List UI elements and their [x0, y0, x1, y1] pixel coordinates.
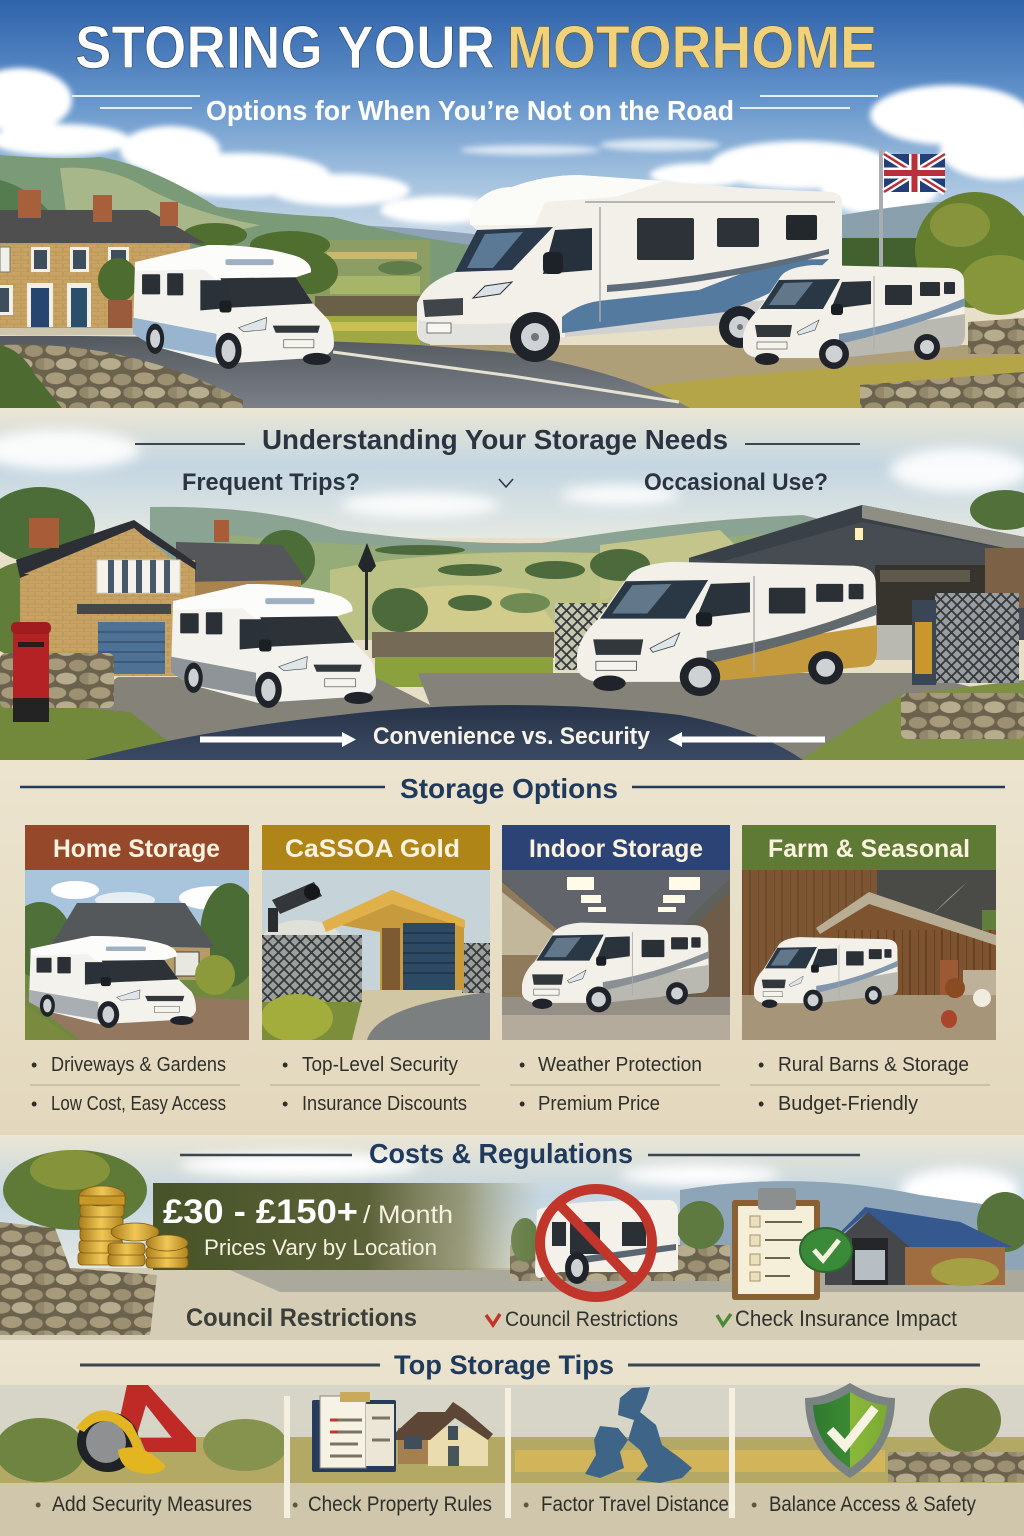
tip three: •: [523, 1495, 529, 1515]
price unit: / Month: [363, 1201, 453, 1229]
needs clouds: [0, 430, 1024, 517]
card title: Indoor Storage: [529, 835, 703, 863]
storage options heading: Storage Options: [400, 773, 618, 804]
trees right: [842, 192, 1024, 315]
icon: wheel clamp: [76, 1385, 196, 1474]
costs ground: [0, 1268, 1024, 1340]
tip four: •: [751, 1495, 757, 1515]
chevron: [499, 479, 513, 487]
card scene: [25, 870, 249, 1040]
card: cassoa gold: [261, 825, 490, 1115]
card title: Home Storage: [53, 835, 220, 863]
card scene: [502, 870, 730, 1040]
tips landscape strip: [0, 1388, 1024, 1536]
bullet one: •: [31, 1055, 37, 1075]
security gate: [555, 593, 1019, 685]
motorhome right: [743, 265, 965, 369]
back trees left: [0, 487, 315, 658]
subtitle: Options for When You’re Not on the Road: [206, 95, 734, 126]
icon: property house: [396, 1402, 493, 1466]
far hills: [330, 200, 960, 280]
frequent trips label: Frequent Trips?: [182, 469, 360, 496]
card: cassoa gold: Top-Level Security: [302, 1054, 458, 1076]
mid trees: [511, 1201, 724, 1262]
price note: Prices Vary by Location: [204, 1235, 437, 1260]
stone walls: [0, 653, 1024, 739]
house: [16, 518, 307, 676]
barn icon: [823, 1207, 1012, 1286]
row of cottages: [0, 190, 205, 335]
council restrictions label: Council Restrictions: [505, 1308, 678, 1331]
barn: [689, 505, 1024, 660]
ireland: [585, 1426, 628, 1478]
tip four: Balance Access & Safety: [769, 1493, 976, 1516]
motorhome centre: [417, 175, 842, 362]
tip one: Add Security Measures: [52, 1493, 252, 1516]
grass bank left: [0, 700, 173, 760]
bullet two: •: [282, 1094, 288, 1114]
card scene: [262, 870, 490, 1040]
tips hazy sky: [0, 1385, 1024, 1440]
check badge: [800, 1228, 852, 1272]
motorhome left: [133, 245, 334, 369]
no parking sign with motorhome: [535, 1189, 678, 1297]
needs hills and fields: [150, 507, 900, 640]
green check: [717, 1314, 731, 1325]
costs section: [0, 1135, 1024, 1340]
convenience vs security label: Convenience vs. Security: [373, 723, 651, 750]
lawn: [375, 657, 553, 687]
motorhome home side: [171, 584, 376, 708]
left tree: [3, 1150, 147, 1230]
back wall: [372, 632, 554, 658]
council restrictions bold label: Council Restrictions: [186, 1304, 417, 1332]
icon: shield: [805, 1383, 895, 1478]
card: home storage: [8, 825, 260, 1115]
bullet one: •: [282, 1055, 288, 1075]
card: farm and seasonal: [742, 825, 1002, 1115]
tip two: •: [292, 1495, 298, 1515]
tree line: [183, 223, 422, 294]
icon: uk map: [585, 1387, 692, 1483]
needs sky: [0, 408, 1024, 538]
motorhome secure side: [577, 562, 877, 696]
stone wall left: [0, 1222, 157, 1335]
tip one: •: [35, 1495, 41, 1515]
clouds: [0, 68, 1024, 224]
bullet two: •: [31, 1094, 37, 1114]
road edge line: [333, 352, 679, 402]
tips background: [0, 1340, 1024, 1536]
parchment background: [0, 760, 1024, 1137]
red check: [486, 1314, 500, 1325]
hero section: [0, 0, 1024, 408]
far hills: [680, 1181, 1024, 1270]
tip three: Factor Travel Distance: [541, 1493, 729, 1516]
title accent: MOTORHOME: [507, 14, 877, 81]
card scene: [742, 870, 996, 1040]
costs heading: Costs & Regulations: [369, 1138, 633, 1169]
bullet one: •: [758, 1055, 764, 1075]
fern: [0, 345, 62, 408]
right tree: [977, 1192, 1024, 1252]
background wall: [510, 1245, 730, 1281]
road strip: [230, 1270, 1024, 1292]
card: indoor storage: [502, 825, 730, 1115]
clipboard icon: [732, 1188, 820, 1300]
card: indoor storage: Premium Price: [538, 1093, 660, 1115]
tips heading: Top Storage Tips: [394, 1350, 614, 1380]
title: STORING YOUR: [75, 14, 495, 81]
flag: [879, 148, 945, 266]
card: cassoa gold: Insurance Discounts: [302, 1093, 467, 1115]
back trees right: [970, 490, 1024, 530]
price amount: £30 - £150+: [163, 1193, 358, 1231]
bullet two: •: [519, 1094, 525, 1114]
needs section: [0, 408, 1024, 760]
gravel ground: [300, 345, 1024, 408]
card: home storage: Low Cost, Easy Access: [51, 1093, 226, 1115]
main hills: [0, 155, 470, 290]
card: indoor storage: Weather Protection: [538, 1054, 702, 1076]
costs clouds: [180, 1153, 1020, 1212]
price banner: [153, 1183, 542, 1270]
fields: [300, 240, 430, 347]
post box: [11, 622, 51, 722]
tips section: [0, 1340, 1024, 1536]
check insurance label: Check Insurance Impact: [735, 1306, 957, 1331]
dark road banner: [85, 705, 803, 760]
card: farm and seasonal: Rural Barns & Storage: [778, 1054, 969, 1076]
back stone wall: [315, 296, 420, 316]
grass verge: [620, 355, 1024, 408]
card: farm and seasonal: Budget-Friendly: [778, 1093, 918, 1115]
occasional use label: Occasional Use?: [644, 469, 828, 496]
arrow right: [200, 732, 356, 747]
tip two: Check Property Rules: [308, 1493, 492, 1516]
driveway and road: [0, 673, 1024, 760]
grass bank right: [800, 680, 1024, 760]
storage options section: [0, 760, 1024, 1137]
great britain: [618, 1387, 692, 1483]
lamp post: [358, 543, 376, 650]
stone walls front: [0, 318, 1024, 408]
card title: CaSSOA Gold: [285, 835, 460, 863]
costs background sky: [0, 1135, 1024, 1270]
arrow left: [668, 732, 825, 747]
card title: Farm & Seasonal: [768, 835, 970, 863]
coin stacks: [78, 1186, 188, 1268]
road: [0, 336, 690, 408]
hero sky: [0, 0, 1024, 260]
bullet two: •: [758, 1094, 764, 1114]
needs heading: Understanding Your Storage Needs: [262, 424, 728, 455]
card: home storage: Driveways & Gardens: [51, 1054, 226, 1076]
icon: documents: [312, 1392, 396, 1472]
bullet one: •: [519, 1055, 525, 1075]
